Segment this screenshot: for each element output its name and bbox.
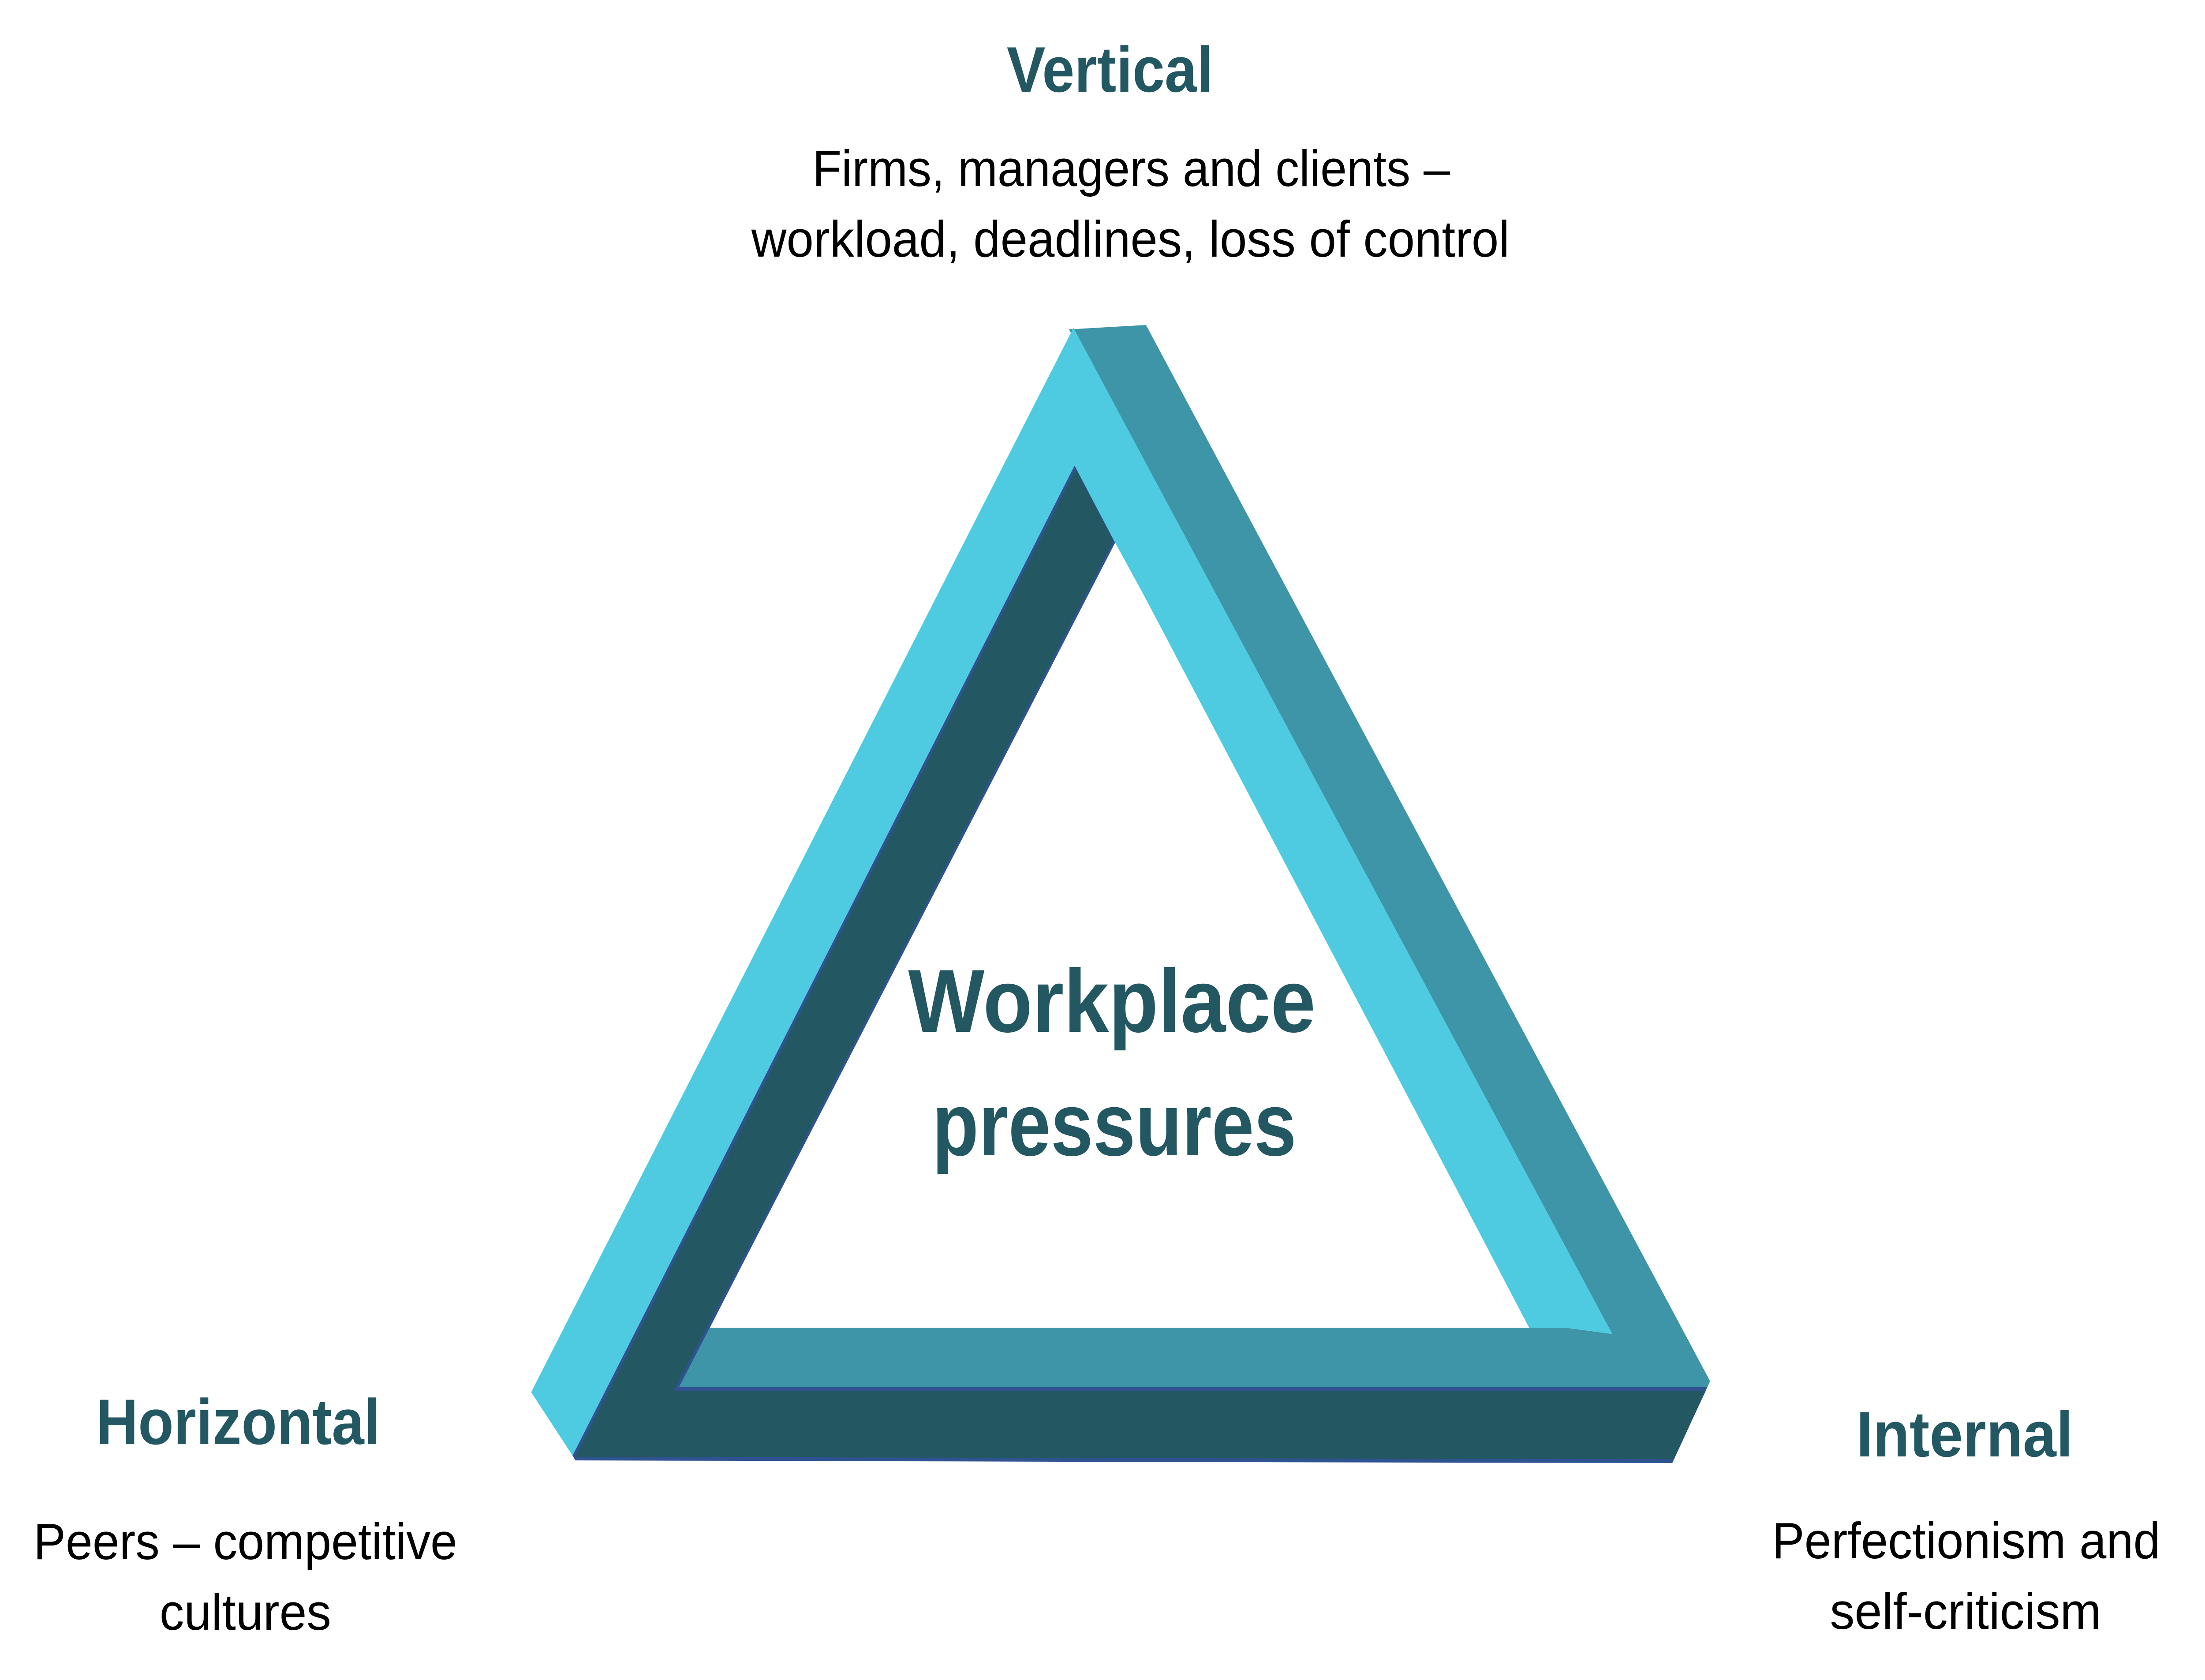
impossible triangle: [531, 325, 1710, 1463]
center title: pressures: [932, 1075, 1297, 1175]
light band: left and inner right faces: [531, 328, 1612, 1456]
horizontal description: [34, 1513, 457, 1641]
label: horizontal: [34, 1386, 457, 1641]
teal band: right and bottom faces: [679, 325, 1710, 1387]
dark band: left inner and bottom faces: [576, 469, 1706, 1459]
horizontal description: cultures: [160, 1584, 331, 1641]
vertical description: Firms, managers and clients –: [812, 140, 1450, 197]
internal heading: Internal: [1856, 1398, 2073, 1470]
label: vertical: [751, 34, 1510, 268]
internal description: self-criticism: [1830, 1583, 2101, 1640]
center title: Workplace: [908, 952, 1316, 1051]
horizontal heading: Horizontal: [96, 1386, 380, 1458]
vertical description: workload, deadlines, loss of control: [751, 211, 1510, 268]
center title: [908, 952, 1316, 1175]
vertical heading: Vertical: [1007, 34, 1213, 105]
internal description: Perfectionism and: [1772, 1512, 2160, 1569]
blue outline of dark band: [572, 466, 1708, 1463]
horizontal description: Peers – competitive: [34, 1513, 457, 1570]
vertical description: [751, 140, 1510, 268]
label: internal: [1772, 1398, 2160, 1640]
internal description: [1772, 1512, 2160, 1640]
